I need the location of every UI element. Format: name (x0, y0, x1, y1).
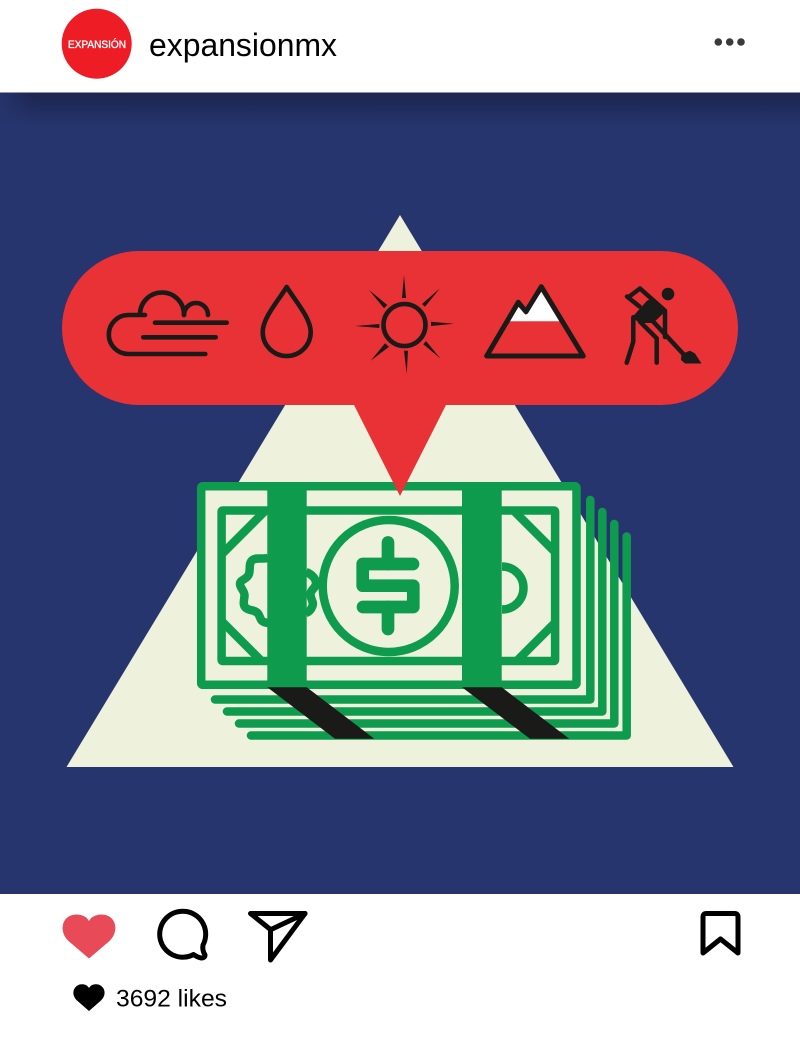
account name: expansionmx (149, 27, 337, 63)
icon: bookmark (703, 914, 738, 953)
band shadows (267, 687, 569, 739)
icon: send arrow (250, 914, 305, 960)
icon: more options dots (714, 38, 745, 46)
scalloped seal (240, 558, 316, 623)
logo: Expansion red circle (62, 9, 132, 79)
vertical bands (267, 482, 307, 687)
bill corner diagonals (222, 510, 555, 661)
right half circle (502, 566, 524, 610)
icon: snowy mountain (487, 287, 583, 356)
stacked bills behind (215, 500, 627, 736)
icon: cloud and wind (109, 292, 227, 354)
speech bubble: climate and labour icons (62, 251, 738, 496)
icon: comment bubble (160, 911, 206, 958)
icon: red like heart (63, 914, 115, 958)
icon: water drop (263, 287, 311, 356)
footer action bar (0, 894, 800, 1039)
icon: sun (355, 275, 454, 374)
header bar (0, 0, 800, 93)
icon: worker with shovel (627, 288, 702, 364)
panel: navy image background (0, 92, 800, 894)
dollar sign (363, 542, 413, 629)
coin circle (323, 520, 455, 652)
pale triangle (66, 215, 734, 767)
likes count: 3692 likes (116, 986, 227, 1013)
icon: small black heart (73, 984, 105, 1011)
logo: Expansion red circle: EXPANSIÓN (68, 38, 126, 51)
front bill (201, 482, 576, 739)
illustration: stack of banknotes (201, 482, 627, 739)
